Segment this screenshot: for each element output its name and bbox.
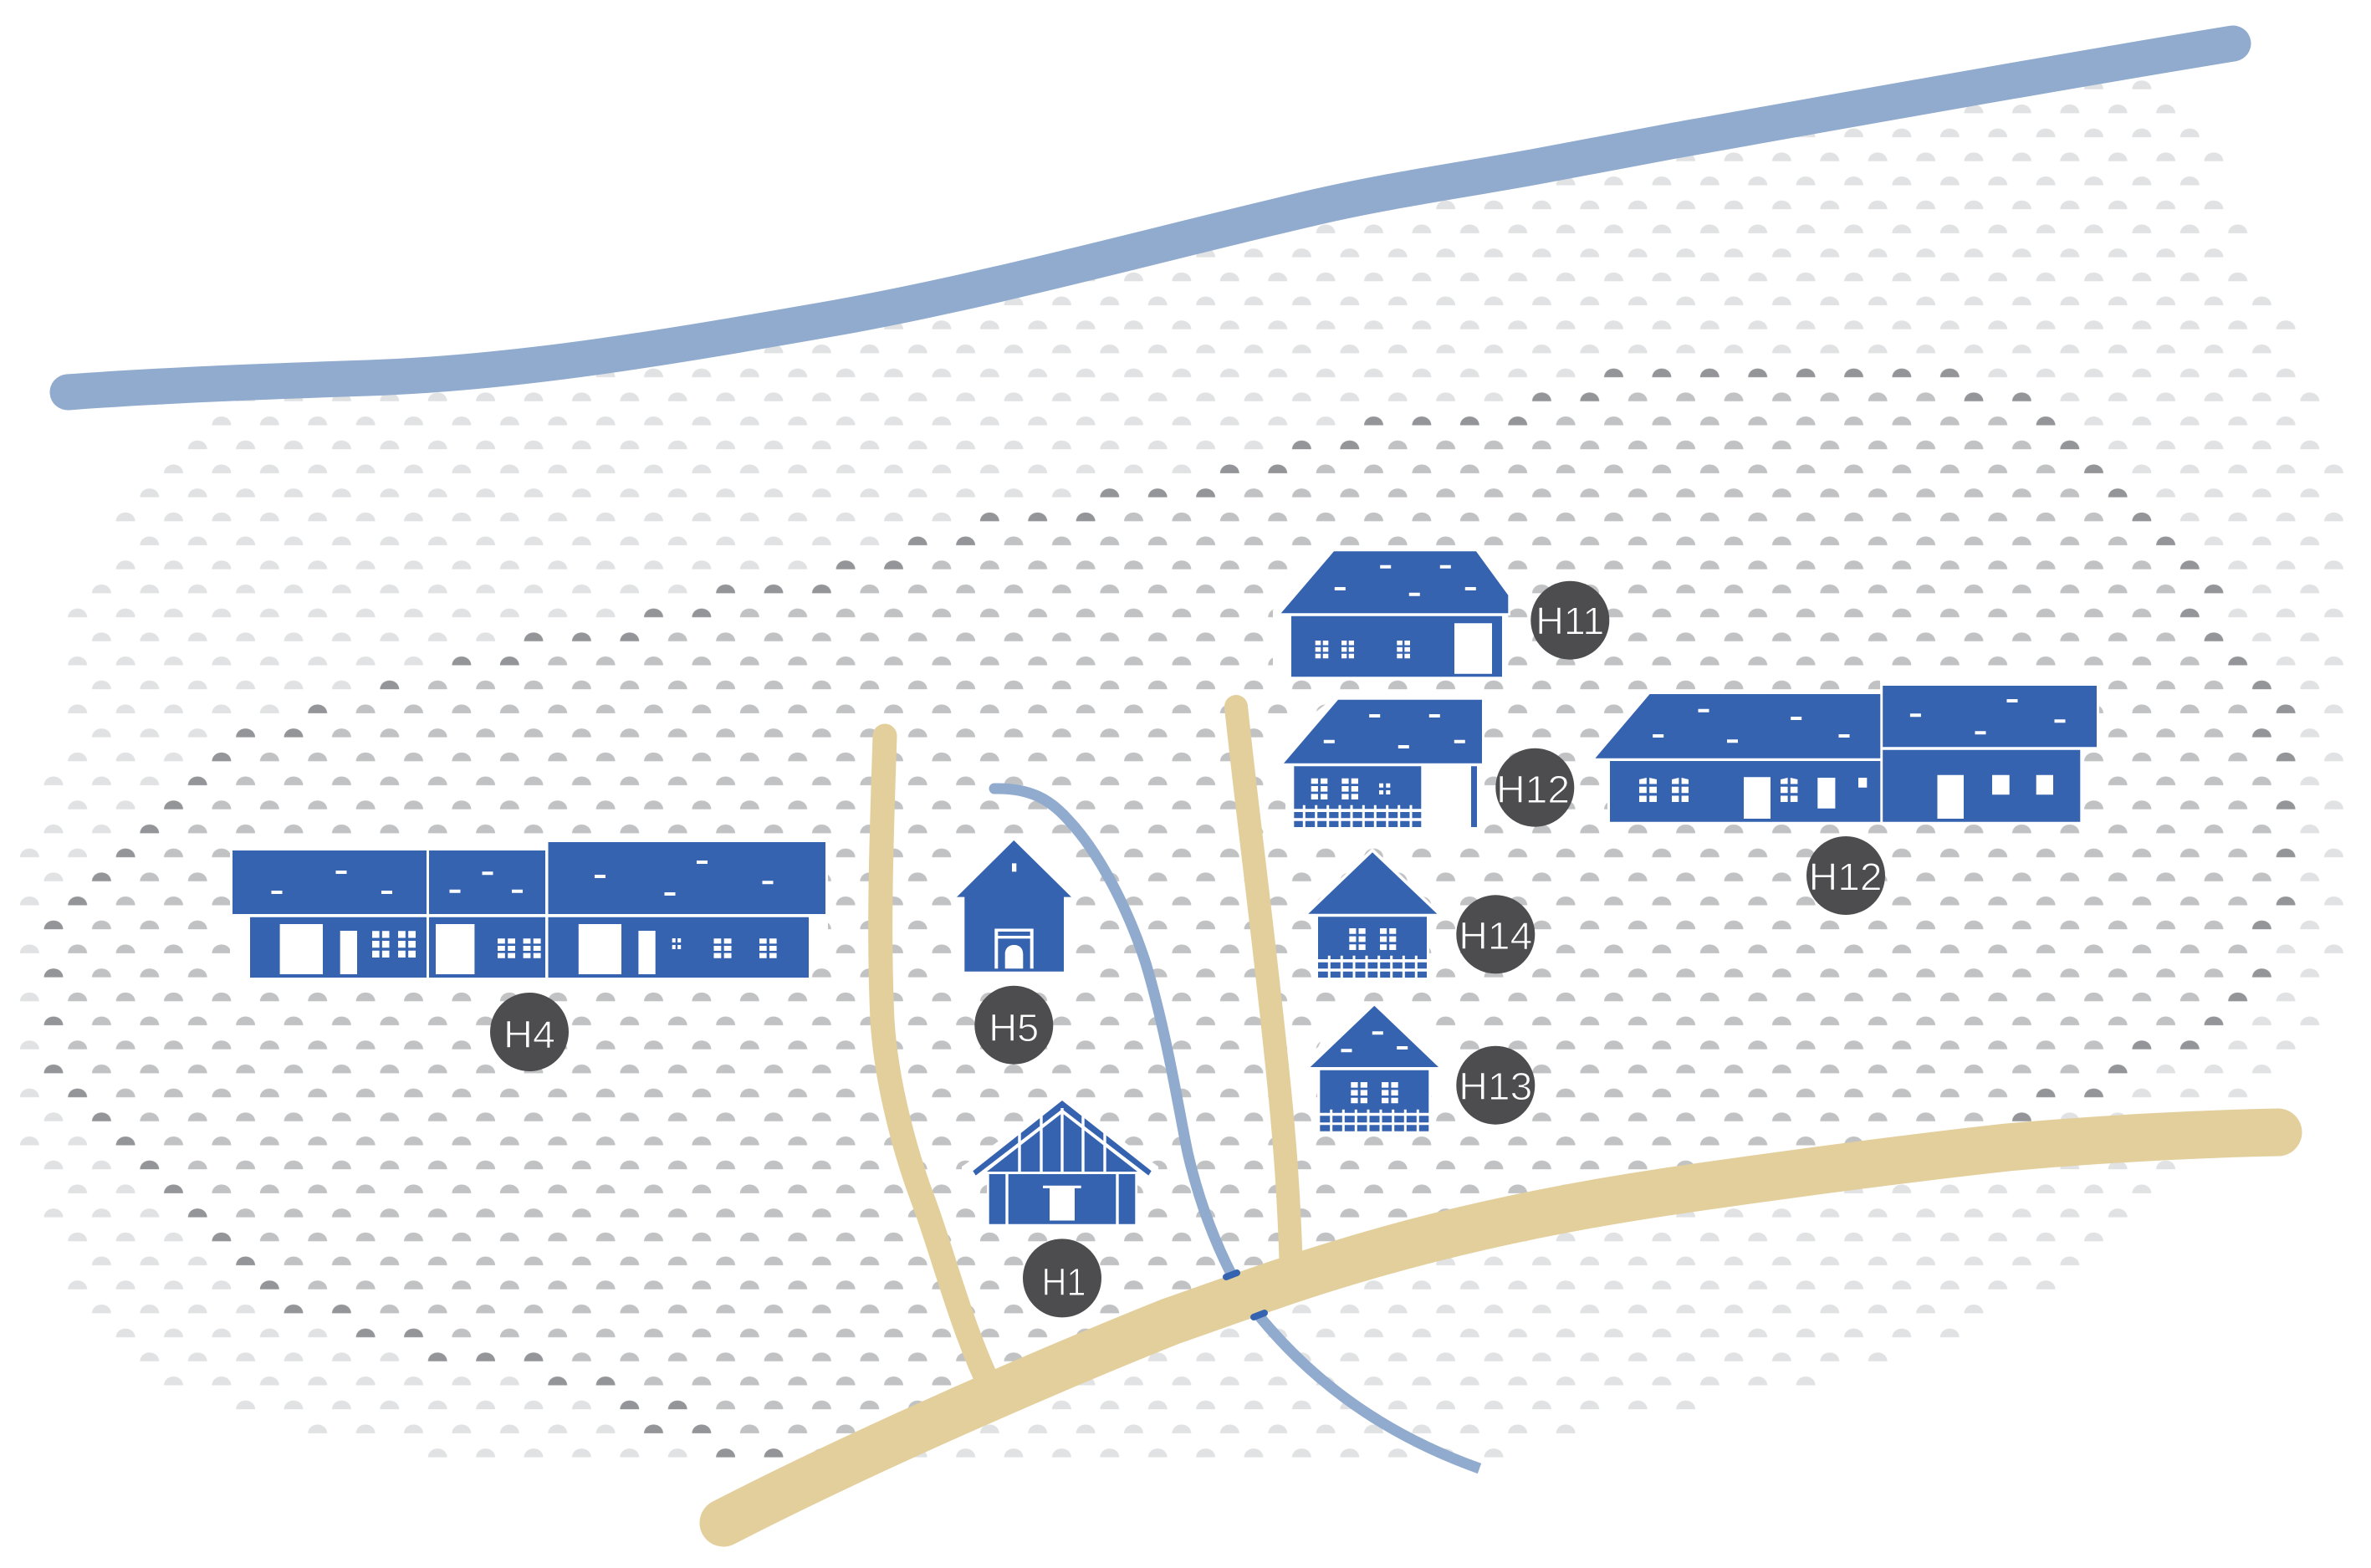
road: main bbox=[723, 1132, 2278, 1523]
mid grey inner dots bbox=[65, 389, 2274, 1469]
bridge: lower culvert mark bbox=[1254, 1313, 1265, 1317]
river: upper wide channel bbox=[68, 43, 2233, 392]
building H5 bbox=[955, 840, 1074, 978]
stream: lower section bbox=[1259, 1315, 1479, 1468]
label H1: H1 bbox=[1042, 1260, 1086, 1304]
label H1 bbox=[1023, 1239, 1101, 1317]
road: middle branch bbox=[1236, 707, 1291, 1271]
label H11: H11 bbox=[1536, 599, 1604, 642]
label H5: H5 bbox=[989, 1006, 1039, 1050]
bridge: upper culvert mark bbox=[1226, 1273, 1237, 1277]
label H14 bbox=[1456, 895, 1535, 973]
label H4: H4 bbox=[503, 1013, 555, 1056]
building H11 bbox=[1273, 549, 1510, 679]
stream: upper section bbox=[994, 789, 1232, 1275]
building H12 left bbox=[1266, 697, 1484, 835]
dark contour dots bbox=[42, 365, 2297, 1469]
label H14: H14 bbox=[1459, 914, 1532, 958]
label H4 bbox=[490, 993, 569, 1071]
label H12 left bbox=[1495, 748, 1574, 827]
building H1 bbox=[962, 1097, 1158, 1227]
road: left branch bbox=[881, 736, 991, 1388]
building H13 bbox=[1290, 1006, 1459, 1134]
label H13: H13 bbox=[1459, 1065, 1532, 1108]
building H12 right bbox=[1589, 679, 2099, 825]
building H14 bbox=[1301, 848, 1444, 980]
label H13 bbox=[1456, 1046, 1535, 1125]
label H11 bbox=[1530, 581, 1609, 660]
label H5 bbox=[974, 986, 1053, 1065]
label H12 right bbox=[1806, 836, 1885, 915]
label H12 right: H12 bbox=[1809, 855, 1883, 898]
label H12 left: H12 bbox=[1496, 768, 1570, 811]
building H4 bbox=[230, 840, 828, 980]
